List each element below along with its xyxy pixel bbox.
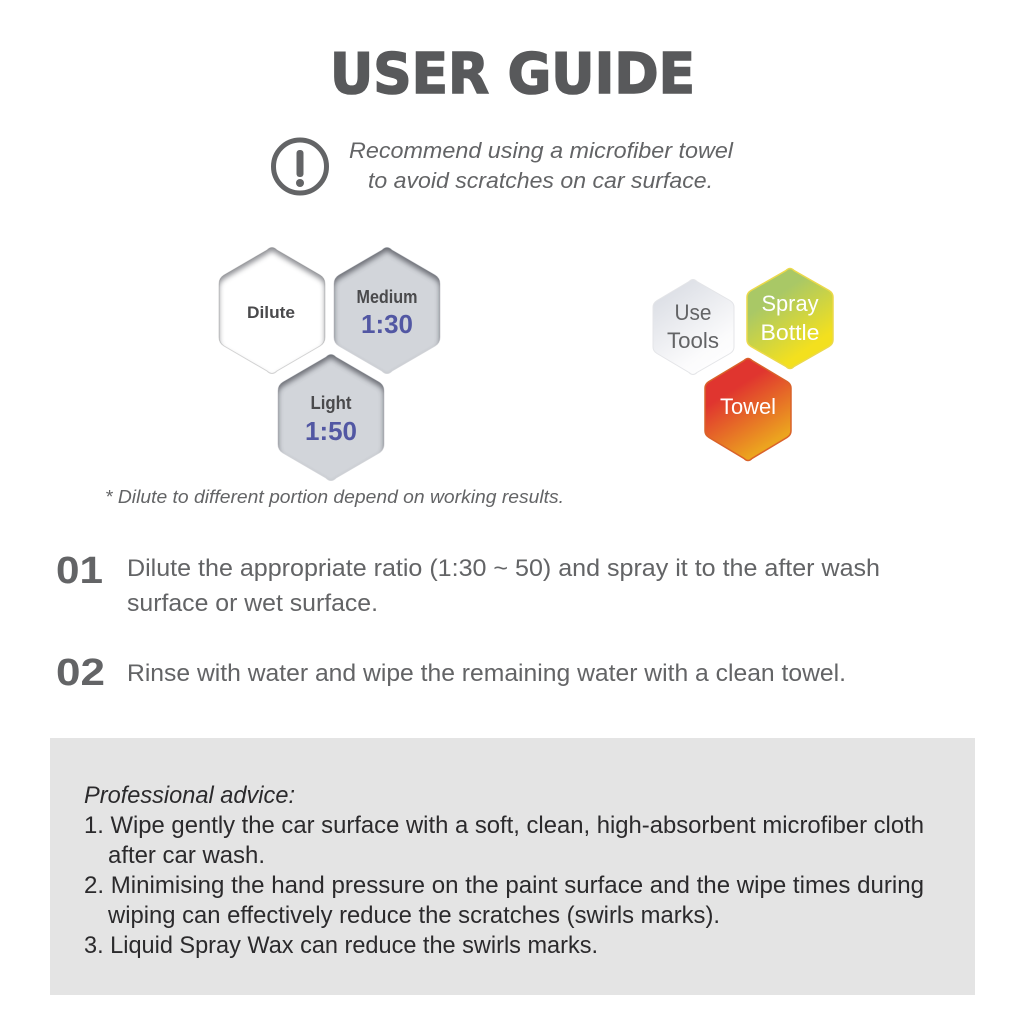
- hexagon: Dilute: [218, 247, 326, 374]
- step 01: Dilute the appropriate ratio (1:30 ~ 50) and spray it to the after wash: [127, 555, 880, 582]
- hexagon: Spray Bottle: Spray: [762, 291, 818, 316]
- hexagon: Use Tools: [653, 280, 734, 374]
- icon: exclamation warning: [274, 140, 326, 193]
- hexagon: Spray Bottle: [747, 268, 833, 368]
- hexagon: Light 1:50: [278, 354, 384, 481]
- step 02: 02: [56, 652, 105, 694]
- hexagon: Dilute: Dilute: [247, 303, 295, 322]
- hexagon: Towel: [705, 358, 791, 460]
- advice text: after car wash.: [108, 842, 265, 869]
- advice text: wiping can effectively reduce the scratches (swirls marks).: [107, 902, 720, 929]
- step 01: [56, 550, 880, 617]
- dilution footnote: * Dilute to different portion depend on working results.: [105, 487, 564, 507]
- hexagon: Light 1:50: Light: [310, 393, 352, 413]
- hexagon: Medium 1:30: [334, 247, 440, 374]
- advice text: Professional advice:: [84, 782, 295, 809]
- hexagon: Use Tools: Use: [674, 300, 712, 325]
- step 02: [56, 652, 846, 694]
- hexagon: Towel: Towel: [720, 394, 776, 419]
- hexagon: Medium 1:30: 1:30: [361, 309, 413, 339]
- step 02: Rinse with water and wipe the remaining water with a clean towel.: [127, 660, 846, 687]
- step 01: surface or wet surface.: [127, 590, 378, 617]
- advice text: 1. Wipe gently the car surface with a soft, clean, high-absorbent microfiber cloth: [84, 812, 924, 839]
- recommendation note: [349, 138, 734, 193]
- recommendation note: to avoid scratches on car surface.: [368, 168, 713, 193]
- step 01: 01: [56, 550, 103, 592]
- advice text: 2. Minimising the hand pressure on the paint surface and the wipe times during: [84, 872, 924, 899]
- advice text: 3. Liquid Spray Wax can reduce the swirls marks.: [84, 932, 598, 959]
- recommendation note: Recommend using a microfiber towel: [349, 138, 734, 163]
- advice text: [84, 782, 924, 959]
- hexagon: Use Tools: Tools: [667, 328, 719, 353]
- panel: professional advice: [50, 738, 975, 995]
- title: USER GUIDE: [330, 42, 695, 107]
- hexagon: Light 1:50: 1:50: [305, 416, 357, 446]
- hexagon: Spray Bottle: Bottle: [760, 320, 820, 345]
- hexagon: Medium 1:30: Medium: [356, 287, 418, 307]
